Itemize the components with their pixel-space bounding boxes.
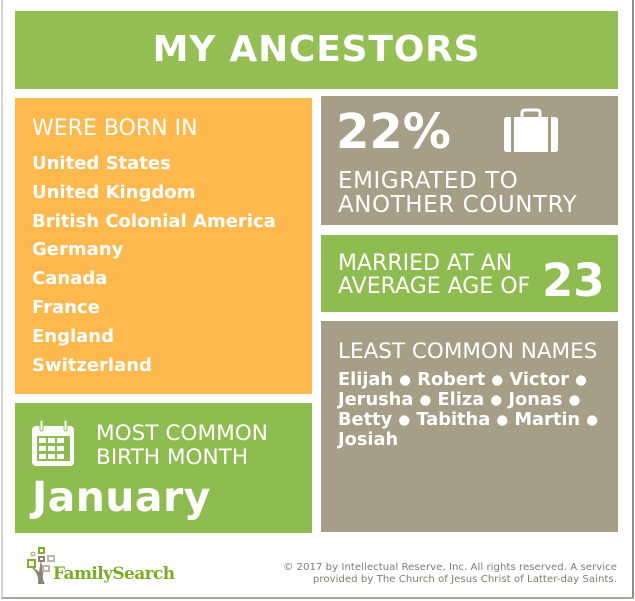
list of countries: Germany — [32, 239, 123, 260]
heading: most common birth month: BIRTH MONTH — [96, 445, 248, 470]
list of countries: England — [32, 326, 114, 347]
list of names: Jerusha ● Eliza ● Jonas ● — [338, 389, 580, 410]
text: married at an average age of — [338, 251, 530, 299]
list of countries — [32, 153, 276, 376]
heading: most common birth month: MOST COMMON — [96, 421, 268, 446]
title banner — [15, 11, 618, 89]
title: MY ANCESTORS — [153, 29, 480, 70]
list of names: Betty ● Tabitha ● Martin ● — [338, 409, 598, 430]
copyright text: provided by The Church of Jesus Christ of Latter-day Saints. — [313, 574, 617, 584]
panel: married age — [321, 235, 618, 312]
panel: least common names — [321, 321, 618, 532]
text: emigrated to another country: EMIGRATED TO — [338, 168, 518, 194]
copyright text: © 2017 by Intellectual Reserve, Inc. All rights reserved. A service — [283, 562, 617, 573]
value: January: January — [32, 473, 211, 521]
icon: calendar — [32, 420, 74, 466]
list of names — [337, 369, 598, 450]
text: emigrated to another country — [338, 168, 577, 218]
heading: were born in: WERE BORN IN — [32, 116, 198, 141]
panel: most common birth month — [15, 403, 312, 533]
text: married at an average age of: AVERAGE AGE OF — [338, 274, 530, 299]
list of countries: United States — [32, 153, 171, 174]
icon: family tree — [27, 547, 55, 584]
panel: emigrated — [321, 96, 618, 225]
list of names: Josiah — [338, 429, 398, 450]
heading: most common birth month — [96, 421, 268, 470]
list of countries: United Kingdom — [32, 182, 195, 203]
text: emigrated to another country: ANOTHER COUNTRY — [338, 192, 577, 218]
list of countries: British Colonial America — [32, 211, 276, 232]
value: 22%: 22% — [336, 104, 451, 160]
icon: suitcase — [504, 108, 558, 152]
panel: were born in — [15, 98, 312, 394]
list of names: Elijah ● Robert ● Victor ● — [338, 369, 587, 390]
logo: FamilySearch — [27, 547, 175, 584]
list of countries: Canada — [32, 268, 107, 289]
wordmark: FamilySearch — [53, 564, 175, 584]
value: 23: 23 — [542, 254, 605, 307]
text: married at an average age of: MARRIED AT AN — [338, 251, 512, 276]
heading: least common names: LEAST COMMON NAMES — [338, 339, 597, 364]
copyright text — [283, 562, 617, 584]
list of countries: Switzerland — [32, 355, 152, 376]
list of countries: France — [32, 297, 100, 318]
